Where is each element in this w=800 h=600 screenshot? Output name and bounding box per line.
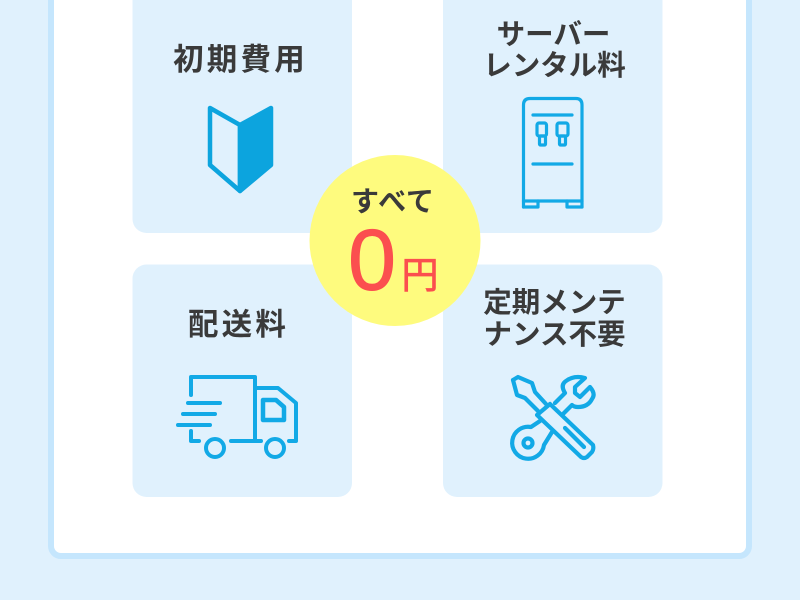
card: initial cost (132, 0, 352, 233)
heading: maintenance free: ナンス不要 (484, 319, 625, 351)
heading: initial cost: 初期費用 (173, 43, 308, 77)
icon: beginner mark (210, 108, 271, 191)
icon: delivery truck (178, 377, 296, 457)
icon: water server (524, 98, 582, 207)
card: maintenance free (443, 264, 662, 497)
badge amount: 0 (348, 212, 396, 308)
badge: all zero yen (310, 155, 480, 326)
heading: delivery fee: 配送料 (188, 308, 289, 342)
heading: server rental fee: サーバー (497, 19, 610, 51)
heading: maintenance free: 定期メンテ (483, 287, 626, 319)
badge unit: 円 (402, 255, 438, 296)
icon: screwdriver and wrench (512, 377, 594, 459)
card: delivery fee (132, 264, 352, 497)
card: server rental fee (443, 0, 662, 233)
badge label: すべて (351, 186, 435, 217)
heading: server rental fee: レンタル料 (483, 50, 626, 82)
